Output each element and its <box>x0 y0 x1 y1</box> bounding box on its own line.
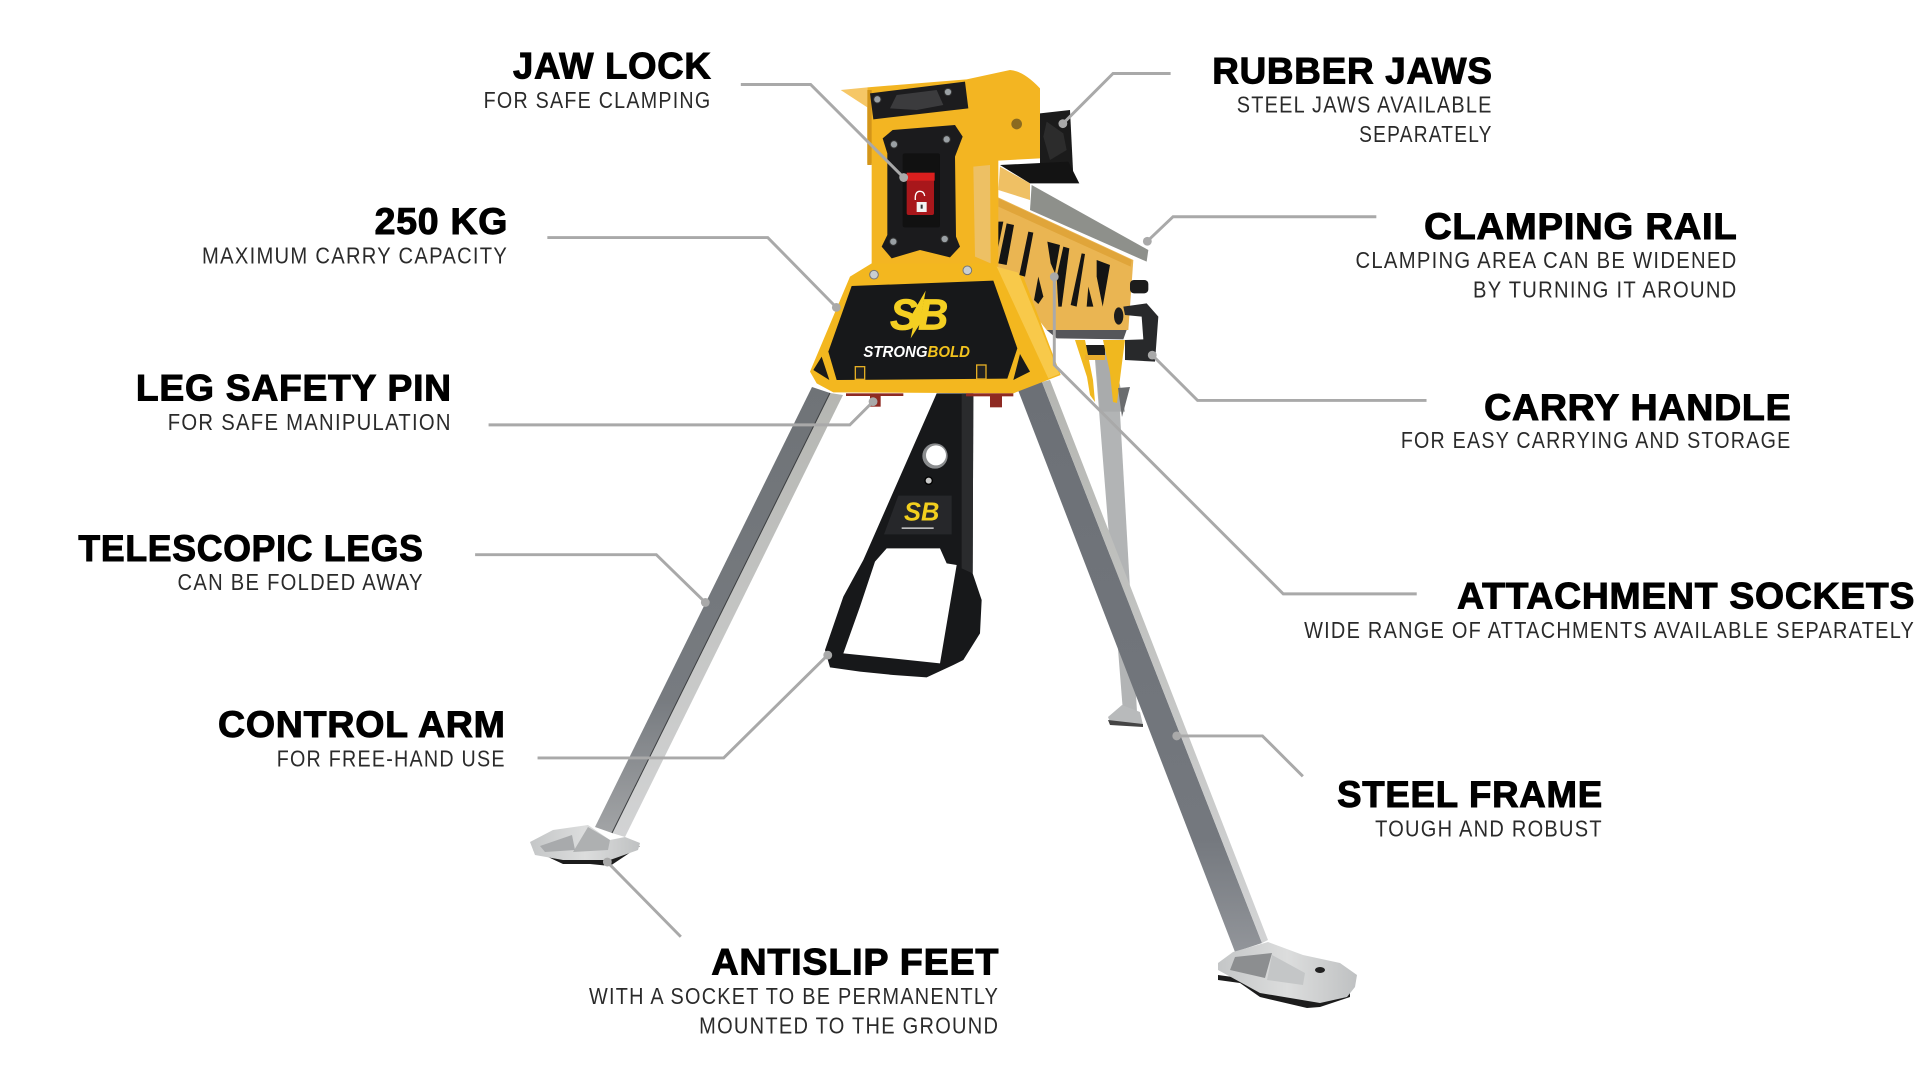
leader line: leg safety pin <box>489 397 877 425</box>
logo: SB mark: SB <box>890 291 948 339</box>
leader line: attachment sockets <box>1050 272 1417 594</box>
label: control arm: FOR FREE-HAND USE <box>277 746 506 772</box>
jaw block top <box>870 82 968 119</box>
base housing <box>810 263 1061 393</box>
label: clamping rail: CLAMPING RAIL <box>1424 206 1738 247</box>
label: carry handle: CARRY HANDLE <box>1484 387 1791 428</box>
label: clamping rail <box>1356 206 1738 303</box>
label: attachment sockets <box>1304 576 1915 643</box>
label: leg safety pin <box>136 367 452 435</box>
label: rubber jaws <box>1212 50 1493 147</box>
leader line: rubber jaws <box>1058 73 1171 128</box>
label: steel frame: STEEL FRAME <box>1337 774 1603 815</box>
label: jaw lock: JAW LOCK <box>513 45 711 86</box>
logo: STRONGBOLD wordmark: STRONGBOLD <box>863 344 970 361</box>
leg safety pins <box>846 393 1013 407</box>
clamping rail truss <box>997 197 1133 339</box>
label: telescopic legs <box>78 528 424 595</box>
label: jaw lock <box>484 45 711 113</box>
label: antislip feet <box>589 942 999 1038</box>
label: rubber jaws: SEPARATELY <box>1359 121 1493 147</box>
head top plate and column <box>841 70 1040 267</box>
label: control arm: CONTROL ARM <box>218 704 506 745</box>
right front leg <box>1018 380 1268 952</box>
leader line: steel frame <box>1172 732 1303 776</box>
right antislip foot <box>1218 942 1357 1008</box>
leader line: control arm <box>538 651 832 758</box>
workbench head <box>810 70 1158 417</box>
rubber jaws <box>998 110 1079 200</box>
label: antislip feet: WITH A SOCKET TO BE PERMANENTLY <box>589 983 999 1009</box>
label: antislip feet: ANTISLIP FEET <box>711 942 999 983</box>
label: rubber jaws: RUBBER JAWS <box>1212 50 1493 91</box>
leader line: jaw lock <box>741 84 908 182</box>
label: clamping rail: BY TURNING IT AROUND <box>1473 277 1738 303</box>
under-rail bracket <box>1075 340 1130 417</box>
leader line: telescopic legs <box>475 555 710 607</box>
control arm logo plate: SB <box>904 497 939 527</box>
label: antislip feet: MOUNTED TO THE GROUND <box>699 1012 999 1038</box>
label: 250 kg: MAXIMUM CARRY CAPACITY <box>202 242 508 268</box>
leader line: clamping rail <box>1143 217 1376 246</box>
label: steel frame <box>1337 774 1603 841</box>
control arm <box>825 393 982 677</box>
label: carry handle <box>1401 387 1791 453</box>
carry handle <box>1114 280 1158 362</box>
label: attachment sockets: ATTACHMENT SOCKETS <box>1457 576 1915 617</box>
label: 250 kg: 250 KG <box>375 201 508 242</box>
label: telescopic legs: CAN BE FOLDED AWAY <box>178 569 424 595</box>
left antislip foot <box>530 825 640 866</box>
label: clamping rail: CLAMPING AREA CAN BE WIDENED <box>1356 247 1738 273</box>
label: control arm <box>218 704 506 772</box>
leader line: antislip feet <box>603 858 681 937</box>
label: leg safety pin: LEG SAFETY PIN <box>136 367 452 408</box>
left front leg <box>595 387 843 837</box>
label: carry handle: FOR EASY CARRYING AND STORAGE <box>1401 427 1791 453</box>
control arm logo plate <box>884 496 952 534</box>
jaw lock panel <box>882 125 963 258</box>
control arm socket ring <box>922 443 948 469</box>
label: steel frame: TOUGH AND ROBUST <box>1375 815 1603 841</box>
rear leg <box>1095 360 1143 727</box>
label: telescopic legs: TELESCOPIC LEGS <box>78 528 424 569</box>
leader line: 250 kg <box>547 238 841 312</box>
label: jaw lock: FOR SAFE CLAMPING <box>484 87 711 113</box>
label: rubber jaws: STEEL JAWS AVAILABLE <box>1237 92 1493 118</box>
leader line: carry handle <box>1148 351 1427 400</box>
red lock switch <box>907 173 935 215</box>
label: leg safety pin: FOR SAFE MANIPULATION <box>168 409 452 435</box>
clamping rail <box>1030 185 1148 262</box>
label: 250 kg <box>202 201 508 268</box>
